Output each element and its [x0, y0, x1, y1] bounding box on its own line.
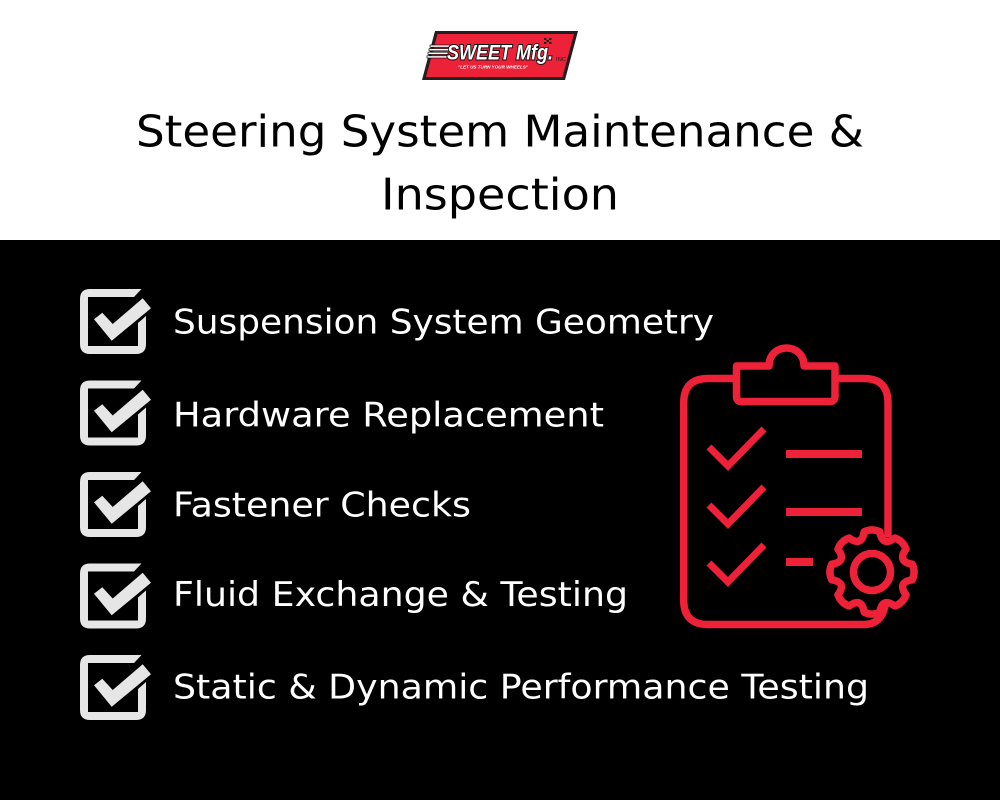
checklist item 4: [80, 564, 628, 628]
checklist item 5: [80, 655, 869, 720]
checklist item 2: Hardware Replacement: [173, 396, 604, 436]
title: Steering System Maintenance &: [136, 106, 864, 158]
logo: Sweet Mfg: [422, 31, 578, 80]
checklist item 1: Suspension System Geometry: [173, 303, 714, 343]
checklist item 1: [80, 289, 714, 354]
icon: clipboard with gear: [684, 348, 914, 624]
title: Inspection: [381, 170, 619, 220]
checklist item 3: [80, 472, 471, 537]
header background: [0, 0, 1000, 240]
logo: Sweet Mfg: INC: [556, 57, 566, 63]
logo: Sweet Mfg: "LET US TURN YOUR WHEELS": [458, 64, 529, 70]
title: [136, 106, 864, 220]
checklist item 3: Fastener Checks: [173, 486, 471, 526]
logo: Sweet Mfg: SWEET Mfg.: [447, 42, 553, 64]
checklist item 4: Fluid Exchange & Testing: [173, 575, 628, 615]
dark panel: [0, 240, 1000, 800]
checklist item 2: [80, 380, 604, 446]
checklist item 5: Static & Dynamic Performance Testing: [173, 667, 869, 707]
